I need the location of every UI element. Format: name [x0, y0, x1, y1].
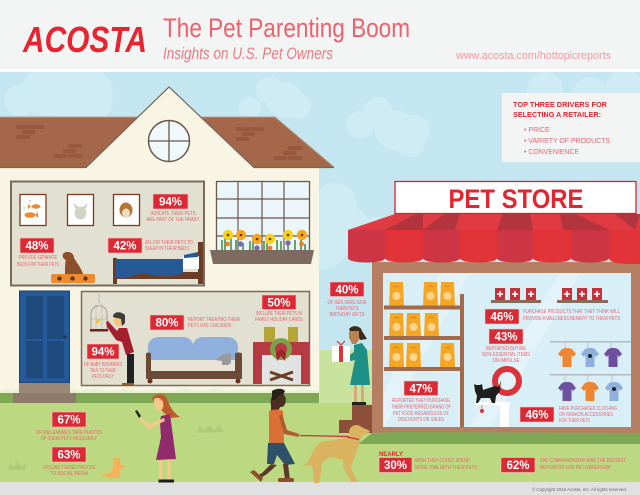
picture: guinea pig	[114, 194, 140, 226]
copyright: © Copyright 2016 Acosta, Inc. All rights reserved.	[532, 486, 627, 492]
stat: 47% brand: DISCOUNTS OR SALES	[398, 417, 444, 423]
wall	[0, 87, 319, 391]
title: The Pet Parenting Boom	[163, 13, 410, 43]
stat: 46% wellness: PROVIDE A WELLNESS BENEFIT TO THEIR PETS	[523, 316, 620, 322]
icon: dog	[300, 425, 370, 483]
stat: 80%: PETS LIKE CHILDREN	[188, 323, 231, 329]
stat: 63% social: TO SOCIAL MEDIA	[50, 471, 89, 477]
stat: nearly 30%	[379, 451, 477, 472]
stat: 40% gen xers: THEIR PETS	[336, 306, 359, 312]
stat: 43% impulse: ON IMPULSE	[492, 358, 520, 364]
stat: 42% sleep: 42%	[113, 240, 137, 252]
store sign: PET STORE	[448, 184, 584, 214]
stat: 63% social	[43, 447, 95, 477]
stat: 46% clothing	[520, 406, 617, 424]
stat: 46% clothing: HAVE PURCHASED CLOTHING	[559, 406, 617, 412]
stat: 50%	[255, 295, 303, 323]
stat: 42% sleep: ALLOW THEIR PETS TO	[145, 240, 193, 246]
icon: bird cage	[90, 293, 108, 332]
stat: 43% impulse: REPORTED BUYING	[486, 346, 526, 352]
stat: 67% millennials	[36, 412, 102, 442]
stat: 67% millennials: OF MILLENNIALS TAKE PHOTOS	[36, 430, 102, 436]
stat: 50%: INCLUDE THEIR PETS IN	[256, 311, 302, 317]
panel: top three drivers: • CONVENIENCE	[524, 149, 579, 156]
website: www.acosta.com/hottopicreports	[455, 50, 611, 62]
panel: top three drivers: TOP THREE DRIVERS FOR	[513, 100, 608, 109]
stat: 40% gen xers: 40%	[335, 284, 359, 296]
stat: 94% family: 94%	[159, 196, 182, 208]
panel: living room	[82, 292, 310, 386]
stat: 94% boomers: PETS DAILY	[92, 374, 114, 380]
stat: 40% gen xers: BIRTHDAY GIFTS	[330, 312, 365, 318]
stat: 43% impulse	[482, 329, 530, 364]
person: woman with gift	[332, 326, 370, 405]
stat: 80%	[150, 315, 240, 330]
stat: 94% boomers: OF BABY BOOMERS	[84, 362, 122, 368]
stat: 47% brand: 47%	[409, 384, 433, 396]
stat: 43% impulse: 43%	[494, 332, 518, 344]
clouds	[4, 63, 640, 270]
stat: 94% boomers: 94%	[91, 346, 115, 358]
person: woman with phone	[135, 394, 180, 482]
bay window with flowers	[210, 181, 314, 264]
stat: 62% companionship: MOTIVATOR FOR PET OWNERSHIP	[540, 465, 611, 471]
stat: 48% beds: BEDS FOR THEIR PETS	[17, 262, 59, 268]
stat: 48% beds	[17, 238, 59, 268]
stat: 46% clothing: FOR THEIR PETS	[559, 418, 590, 424]
panel: top three drivers: • PRICE	[524, 127, 550, 134]
stat: 46% wellness: 46%	[490, 312, 514, 324]
round window	[148, 120, 190, 162]
planter	[210, 250, 314, 264]
icon: bed	[113, 242, 203, 284]
panel: bedroom	[11, 182, 204, 286]
panel: top three drivers: SELECTING A RETAILER:	[513, 110, 601, 119]
roof	[0, 117, 334, 167]
header band	[0, 0, 640, 72]
stat: 46% clothing: 46%	[525, 410, 549, 422]
stat: 43% impulse: NON-ESSENTIAL ITEMS	[482, 352, 530, 358]
picture: fish	[20, 194, 46, 226]
stat: 94% boomers	[84, 344, 122, 380]
stat: 80%: REPORT TREATING THEIR	[188, 317, 240, 323]
stat: nearly 30%: WISH THEY COULD SPEND	[415, 458, 470, 464]
person: man with bird	[106, 312, 134, 386]
icon: black cat	[474, 380, 501, 403]
stat: 94% family	[146, 194, 200, 223]
stat: 50%: FAMILY HOLIDAY CARDS	[255, 317, 303, 323]
awning	[348, 214, 640, 264]
stat: 94% family: INDICATE THEIR PETS	[150, 211, 196, 217]
panel: top three drivers	[502, 93, 640, 162]
icon: orange cat	[100, 458, 126, 478]
icon: cat tree	[475, 369, 519, 427]
stat: 94% family: ARE PART OF THE FAMILY	[146, 217, 200, 223]
logo: ACOSTA	[22, 19, 147, 60]
stat: 48% beds: 48%	[25, 240, 49, 252]
shelves with pet food	[384, 282, 464, 427]
stat: 63% social: 63%	[57, 450, 81, 462]
store sign	[395, 182, 636, 214]
stat: 48% beds: PROVIDE SEPARATE	[19, 255, 57, 261]
house	[0, 87, 334, 391]
subtitle: Insights on U.S. Pet Owners	[163, 45, 333, 63]
stat: 62% companionship: SAY COMPANIONSHIP WAS THE BIGGEST	[540, 458, 626, 464]
stat: nearly 30%: 30%	[384, 460, 407, 472]
icon: dog on bed	[51, 252, 95, 283]
stat: 46% wellness: PURCHASE PRODUCTS THAT THEY THINK WILL	[523, 309, 620, 315]
stat: 80%: 80%	[155, 318, 179, 330]
lawn	[0, 350, 640, 495]
stat: 47% brand: PET FOOD REGARDLESS OF	[393, 411, 449, 417]
stat: 46% clothing: OR FASHION ACCESSORIES	[559, 412, 613, 418]
picture: rabbit	[68, 194, 94, 226]
stat: 42% sleep	[108, 238, 193, 253]
person: man walking dog	[250, 389, 349, 482]
icon: fireplace	[253, 327, 309, 384]
front steps	[13, 383, 76, 403]
stat: 67% millennials: OF THEIR PETS REGULARLY	[41, 436, 97, 442]
flowers	[222, 230, 307, 251]
hedge	[358, 432, 640, 445]
stat: 62% companionship: 62%	[506, 460, 530, 472]
stat: 42% sleep: SLEEP IN THEIR BEDS	[145, 246, 189, 252]
stat: nearly 30%: NEARLY	[379, 451, 404, 458]
store steps	[339, 405, 372, 433]
stat: 47% brand	[391, 381, 451, 423]
stat: 50%: 50%	[267, 298, 291, 310]
stat: 47% brand: THEIR PREFERRED BRAND OF	[391, 404, 451, 410]
stat: 63% social: UPLOAD THOSE PHOTOS	[43, 465, 95, 471]
icon: sofa with cat	[146, 337, 242, 384]
stat: 40% gen xers: OF GEN XERS GIVE	[328, 300, 367, 306]
wellness product shelves	[491, 288, 608, 303]
panel: top three drivers: • VARIETY OF PRODUCTS	[524, 138, 610, 145]
stat: 40% gen xers	[328, 282, 367, 318]
clothing racks	[550, 341, 631, 401]
stat: 62% companionship	[501, 458, 626, 472]
stat: 94% boomers: TALK TO THEIR	[90, 368, 116, 374]
door	[20, 291, 70, 383]
store	[348, 182, 640, 434]
stat: 47% brand: REPORTED THEY PURCHASE	[392, 398, 450, 404]
stat: 46% wellness	[485, 309, 620, 324]
stat: nearly 30%: MORE TIME WITH THEIR PETS	[415, 465, 477, 471]
stat: 67% millennials: 67%	[57, 414, 81, 426]
